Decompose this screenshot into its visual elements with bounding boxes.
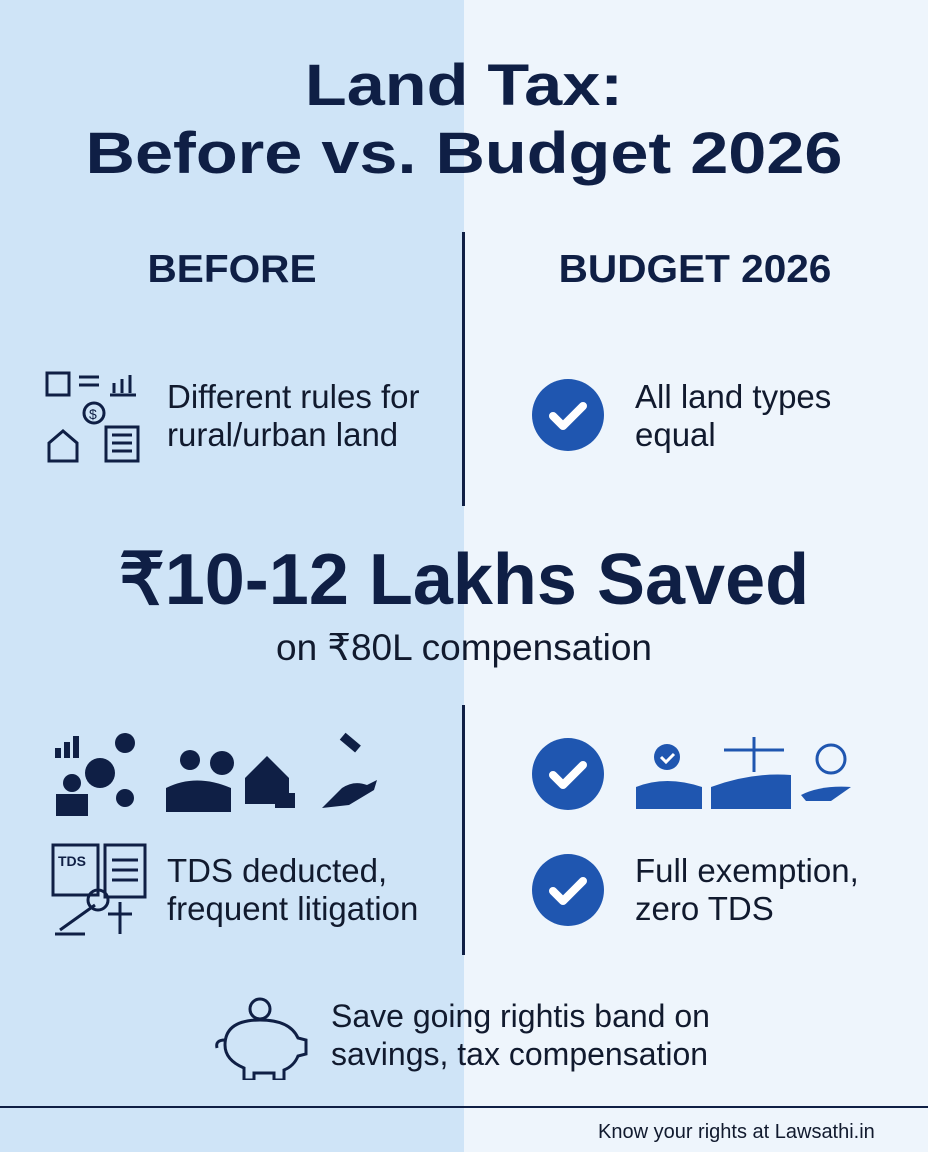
title: Land Tax:	[305, 53, 623, 118]
text: tds deducted: TDS deducted,	[167, 852, 387, 889]
text: savings: Save going rightis band on	[331, 998, 710, 1034]
footer text: Know your rights at Lawsathi.in	[598, 1121, 875, 1143]
heading: before: BEFORE	[147, 248, 316, 291]
text: full exemption	[635, 852, 859, 927]
icon: tds docs	[52, 844, 146, 936]
footer line	[0, 1106, 928, 1108]
text: savings: savings, tax compensation	[331, 1036, 708, 1072]
divider bottom	[462, 705, 465, 955]
big savings: ₹10-12 Lakhs Saved	[119, 540, 809, 620]
divider top	[462, 232, 465, 506]
text: all land types: equal	[635, 416, 716, 453]
text: all land types	[635, 378, 831, 453]
text: different rules	[167, 378, 420, 453]
heading: budget 2026: BUDGET 2026	[559, 248, 831, 291]
title: Before vs. Budget 2026	[86, 121, 842, 186]
icon: rules cluster	[46, 372, 140, 462]
text: tds deducted	[167, 852, 418, 927]
icon: rules cluster: $	[89, 406, 97, 422]
subtitle: on ₹80L compensation	[276, 627, 652, 668]
icon: check 1	[532, 379, 604, 451]
icon: tds docs: TDS	[58, 853, 86, 869]
title	[86, 53, 842, 186]
text: savings	[331, 998, 710, 1072]
icons row budget	[532, 737, 851, 810]
text: full exemption: Full exemption,	[635, 852, 859, 889]
text: different rules: rural/urban land	[167, 416, 398, 453]
text: full exemption: zero TDS	[635, 890, 774, 927]
text: different rules: Different rules for	[167, 378, 420, 415]
icon: check 2	[532, 854, 604, 926]
icons row before	[55, 732, 377, 816]
icon: piggy bank	[215, 998, 308, 1080]
text: all land types: All land types	[635, 378, 831, 415]
text: tds deducted: frequent litigation	[167, 890, 418, 927]
